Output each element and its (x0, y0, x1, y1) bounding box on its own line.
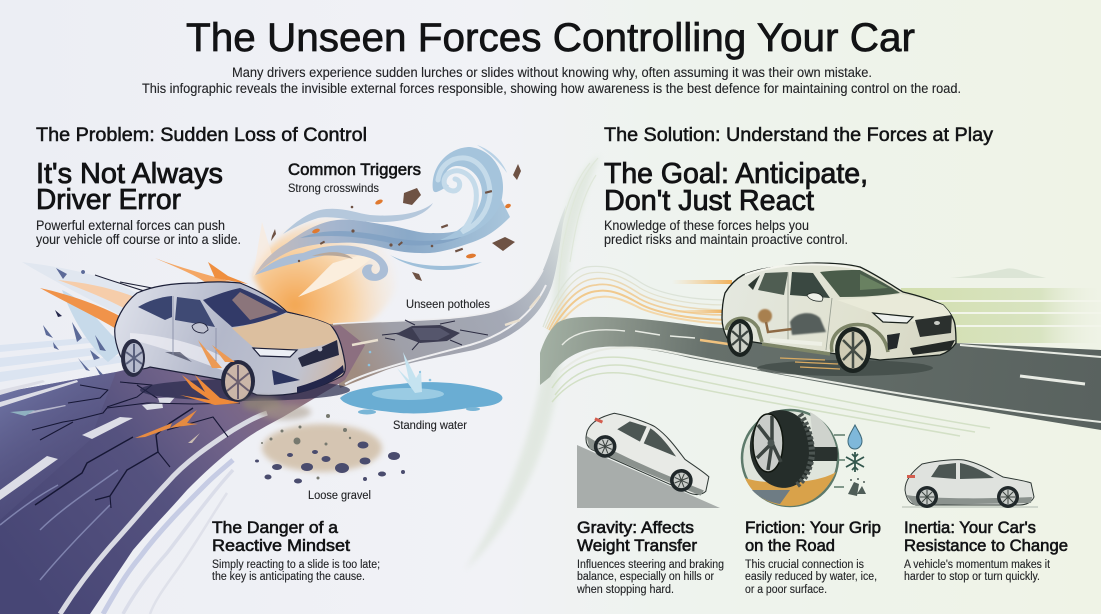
grille (915, 315, 952, 337)
green background streaks (901, 268, 1101, 343)
rear wheel (121, 339, 145, 377)
rear window (138, 296, 172, 320)
gravity text: Influences steering and braking (577, 559, 724, 571)
dust trail (242, 397, 282, 411)
rim (753, 414, 783, 472)
icon: snowflake (846, 452, 864, 472)
road edge lines (60, 413, 267, 614)
section heading: the problem: The Problem: Sudden Loss of Control (36, 125, 367, 146)
friction text: Friction: Your Grip (745, 518, 881, 537)
mirror (807, 293, 823, 301)
powertrain ghost (758, 309, 826, 344)
common triggers heading: Strong crosswinds (288, 181, 379, 195)
undercar orange streaks (780, 358, 840, 369)
inertia text: A vehicle's momentum makes it (904, 559, 1051, 571)
tyre (745, 406, 819, 492)
intro text: This infographic reveals the invisible external forces responsible, showing how awareness is the best defence for maintaining control on the road. (142, 81, 961, 96)
body: external forces: Powerful external forces can push (36, 217, 225, 233)
friction text (745, 518, 881, 596)
text block: reactive mindset: the key is anticipating the cause. (212, 571, 365, 583)
upper wisp (283, 203, 433, 234)
section heading: the solution: The Solution: Understand the Forces at Play (604, 125, 994, 146)
inertia text: Resistance to Change (904, 536, 1068, 555)
car body (115, 282, 345, 395)
illustration: standing water: Standing water (393, 418, 467, 432)
panel: the problem (36, 125, 367, 247)
sparks (180, 375, 240, 405)
body: knowledge: predict risks and maintain proactive control. (604, 231, 848, 247)
friction text: or a poor surface. (745, 584, 827, 596)
strip edge lines (333, 270, 546, 384)
friction illustration: tyre in circle (742, 406, 866, 506)
cracks (32, 382, 240, 508)
faint speed streaks (0, 470, 118, 580)
lower wisp (390, 255, 482, 270)
body: knowledge: Knowledge of these forces helps you (604, 217, 809, 233)
panel: the solution (604, 125, 994, 247)
solution road scene (540, 263, 1101, 436)
decorative green ribbon between problem and solution (465, 155, 600, 570)
car body (722, 263, 956, 360)
pale green contour lines (552, 357, 990, 436)
icon: water drop (848, 425, 862, 449)
lane dashes (0, 380, 175, 500)
text block: reactive mindset (212, 518, 380, 583)
main wind band (255, 197, 510, 275)
headlight (253, 348, 297, 357)
left speed streaks (0, 258, 248, 382)
inertia illustration: car side view (902, 460, 1038, 508)
illustration: standing water (340, 351, 502, 432)
inertia text: Inertia: Your Car's (904, 518, 1036, 537)
intro text: Many drivers experience sudden lurches or slides without knowing why, often assuming it was their own mistake. (232, 65, 872, 80)
small car on slope (580, 402, 721, 502)
gravity text: balance, especially on hills or (577, 571, 714, 583)
side intake (887, 333, 900, 350)
intro text (142, 65, 961, 96)
headline: driver error (36, 158, 223, 216)
lower curl (255, 245, 388, 281)
friction text: This crucial connection is (745, 559, 864, 571)
door seams and highlights (130, 333, 245, 378)
car: pearl SUV with transparent body (722, 263, 956, 376)
lower bumper (272, 370, 300, 385)
road: problem road with cracks (0, 205, 566, 614)
door window (175, 297, 215, 327)
orange impact glow (253, 218, 396, 340)
illustration: loose gravel: Loose gravel (308, 490, 371, 502)
hood (837, 294, 952, 322)
headline: anticipate: The Goal: Anticipate, (604, 158, 868, 190)
body: knowledge (604, 217, 848, 247)
friction text: on the Road (745, 536, 835, 555)
mirror (192, 323, 208, 333)
rear door window (758, 272, 788, 295)
body: external forces (36, 217, 241, 247)
swirl head (433, 147, 503, 240)
road surface (540, 317, 1101, 430)
gravity text: Gravity: Affects (577, 518, 694, 537)
illustration: unseen pothole (382, 297, 490, 350)
ground (745, 472, 836, 506)
inertia text (904, 518, 1068, 583)
headlight (873, 313, 913, 323)
front wheel (835, 327, 871, 373)
wheel arches and sill (726, 318, 888, 354)
title: The Unseen Forces Controlling Your Car (186, 16, 915, 60)
illustration: unseen pothole: Unseen potholes (406, 297, 490, 311)
gravity text: when stopping hard. (576, 584, 674, 596)
common triggers heading (288, 161, 421, 195)
headline: driver error: Driver Error (36, 184, 181, 216)
rear wheel (727, 319, 753, 357)
illustration: crosswinds swirl (255, 145, 521, 281)
car: skidding silver SUV (115, 282, 350, 411)
roof rail highlight (745, 264, 862, 275)
text block: reactive mindset: Reactive Mindset (212, 536, 350, 555)
fender (810, 412, 836, 447)
gravity text: Weight Transfer (577, 536, 697, 555)
rear quarter window (748, 275, 760, 290)
grille (298, 340, 339, 367)
door lines (788, 272, 832, 350)
headline: driver error: It's Not Always (36, 158, 223, 190)
illustration: loose gravel (255, 404, 405, 502)
windshield (820, 270, 900, 297)
inertia text: harder to stop or turn quickly. (904, 571, 1040, 583)
connector lines (834, 435, 845, 487)
windshield (203, 288, 287, 327)
headline: anticipate: Don't Just React (604, 185, 814, 217)
wind debris (271, 164, 521, 281)
main road surface (0, 325, 365, 614)
lower bumper (910, 340, 955, 355)
gravity illustration: car on slope (577, 402, 721, 508)
slope (577, 445, 720, 508)
front door window (790, 272, 830, 298)
headline: anticipate (604, 158, 868, 217)
hood (232, 313, 338, 349)
front wheel (221, 360, 255, 402)
gravity text (576, 518, 724, 596)
icon: debris (848, 478, 866, 496)
common triggers heading: Common Triggers (288, 161, 421, 179)
text block: reactive mindset: The Danger of a (212, 518, 339, 537)
grey road strip to centre (320, 205, 566, 388)
orange and grey flow streaks (543, 266, 732, 332)
friction text: easily reduced by water, ice, (745, 571, 877, 583)
body: external forces: your vehicle off course or into a slide. (36, 231, 241, 247)
road lines (560, 330, 1101, 422)
text block: reactive mindset: Simply reacting to a slide is too late; (212, 559, 380, 571)
flying shards (43, 268, 109, 381)
